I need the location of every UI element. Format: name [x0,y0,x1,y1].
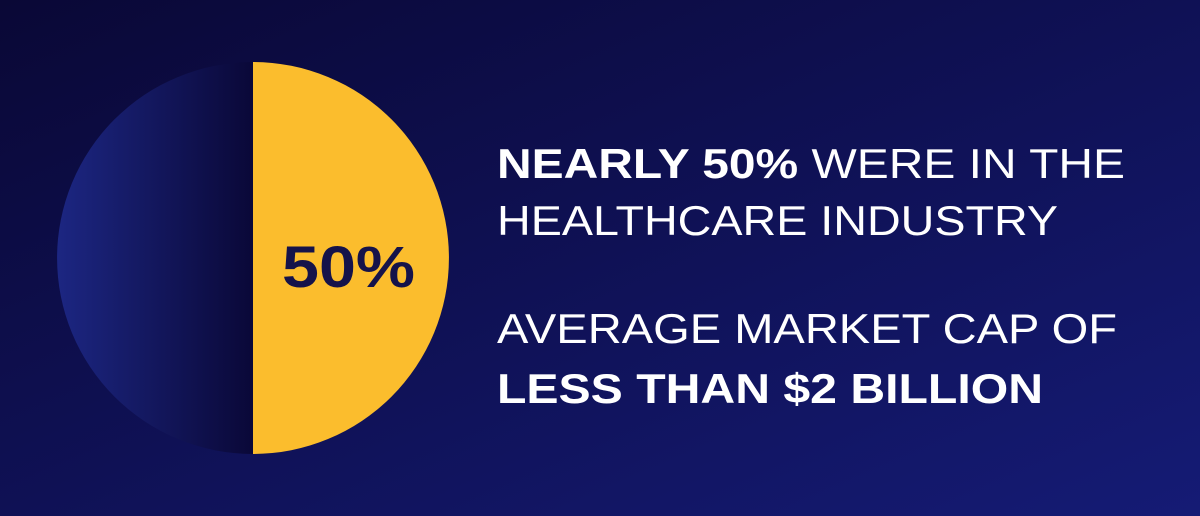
text block: healthcare [497,140,1125,244]
pie right half (yellow) [253,62,449,454]
pie chart: 50% [57,62,449,454]
pie label: 50% [282,235,415,300]
line 2: HEALTHCARE INDUSTRY [497,197,1058,244]
pie left half [57,62,253,454]
text block: market cap [497,305,1117,412]
line 1: NEARLY 50% WERE IN THE [497,140,1125,187]
line 3: AVERAGE MARKET CAP OF [497,305,1117,352]
line 4: LESS THAN $2 BILLION [497,365,1043,412]
